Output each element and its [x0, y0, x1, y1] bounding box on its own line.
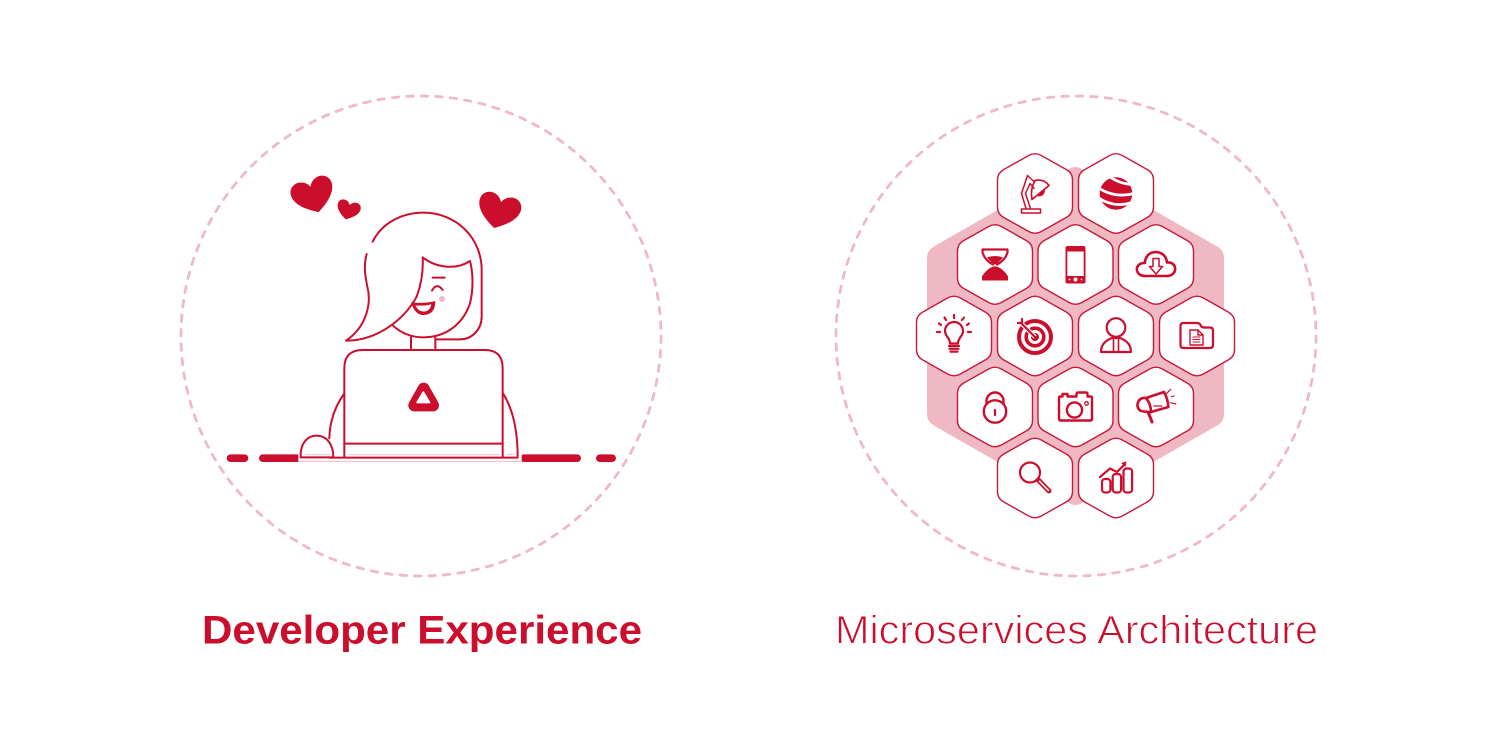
- hexagon: globe: [1078, 154, 1154, 233]
- heart: right: [474, 189, 524, 234]
- panel: developer experience: [181, 96, 661, 652]
- laptop logo: [414, 389, 433, 405]
- hexagon: megaphone: [1118, 367, 1194, 447]
- hexagon: phone: [1038, 225, 1113, 304]
- heading: developer experience: Developer Experience: [202, 608, 642, 652]
- icon: megaphone: [1137, 389, 1176, 422]
- hexagon: light bulb: [916, 296, 992, 376]
- icon: padlock: [984, 392, 1006, 423]
- icon: camera: [1059, 392, 1092, 420]
- icon: hourglass: [982, 250, 1008, 280]
- cheek: [439, 296, 445, 302]
- heart: large left: [288, 173, 339, 219]
- hair back: [373, 213, 482, 339]
- large background hexagon: [927, 167, 1224, 505]
- hexagon: folder: [1160, 296, 1234, 376]
- icon: target with arrow: [1018, 319, 1051, 353]
- hexagon: target: [998, 296, 1072, 376]
- icon: lamp: [1022, 176, 1049, 213]
- icon: striped globe: [1098, 176, 1134, 210]
- hexagon: cloud download: [1118, 225, 1194, 304]
- hair fringe: [346, 254, 472, 341]
- table segments: [227, 454, 616, 462]
- laptop: [344, 350, 503, 457]
- arms: [329, 393, 518, 457]
- icon: bars and arrow: [1100, 462, 1132, 492]
- hexagon: desk lamp: [998, 154, 1072, 233]
- neck: [411, 337, 435, 350]
- icon: bulb: [937, 315, 971, 352]
- icon: smartphone: [1066, 246, 1086, 284]
- hexagon: padlock: [958, 367, 1032, 447]
- hexagon: camera: [1038, 367, 1113, 447]
- hexagon: hourglass: [958, 225, 1032, 304]
- panel: microservices architecture: [835, 96, 1318, 652]
- icon: person with tie: [1101, 318, 1131, 352]
- heart: small: [334, 198, 362, 222]
- icon: cloud with arrow: [1137, 252, 1175, 276]
- hexagon: magnifier: [998, 438, 1072, 518]
- heading: microservices architecture: Microservices Architecture: [835, 608, 1318, 652]
- mouth: [411, 301, 435, 315]
- icon: folder with document: [1180, 323, 1213, 348]
- eyebrow: [433, 275, 445, 281]
- illustration: developer with laptop: [227, 173, 616, 462]
- laptop base: [329, 444, 518, 458]
- winking eye: [432, 286, 443, 291]
- dashed circle: microservices: [836, 96, 1316, 576]
- icon: magnifying glass: [1020, 462, 1049, 491]
- desk gap: [298, 453, 522, 462]
- hand: [301, 436, 333, 457]
- hexagon: person: [1078, 296, 1154, 376]
- hexagon: growth chart: [1078, 438, 1154, 518]
- dashed circle: developer experience: [181, 96, 661, 576]
